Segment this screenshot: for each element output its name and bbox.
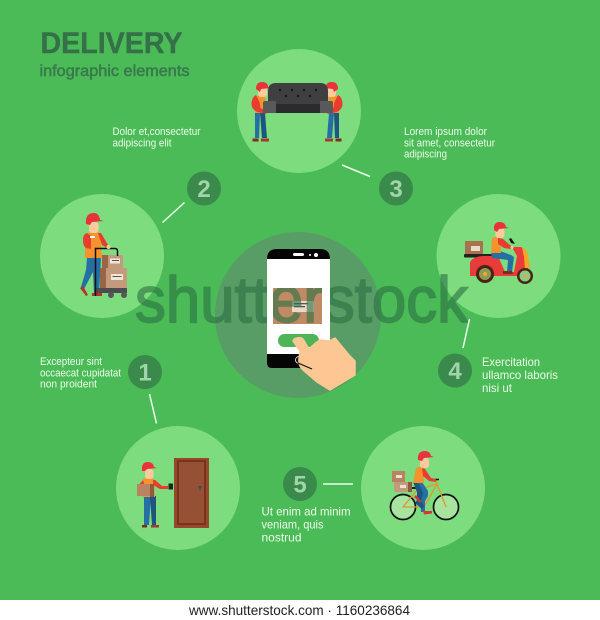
callout: step 5 text	[262, 504, 351, 544]
number badge 3	[379, 172, 413, 206]
subtitle: infographic elements	[40, 63, 190, 80]
number badge 4: 4	[448, 358, 462, 385]
icon: phone speaker and camera	[293, 253, 318, 257]
icon: hand truck with boxes	[95, 248, 127, 298]
callout: step 3 text	[404, 126, 495, 160]
panel: step 2 trolley courier	[40, 194, 164, 318]
panel: step 1 door delivery	[116, 426, 240, 550]
callout: step 4 text: Exercitation	[482, 355, 540, 369]
icon: door	[174, 458, 209, 528]
number badge 5	[283, 467, 317, 501]
icon: phone body	[267, 249, 330, 368]
callout: step 1 text	[40, 356, 121, 390]
connector lines	[150, 165, 470, 484]
callout: step 5 text: veniam, quis	[262, 518, 324, 532]
number badge 1: 1	[138, 360, 152, 386]
icon: parcel on screen	[273, 288, 322, 324]
number badge 2	[187, 172, 221, 206]
callout: step 2 text: Dolor et,consectetur	[112, 126, 201, 138]
icon: confirm button	[278, 334, 319, 347]
icon: rider	[491, 222, 514, 274]
icon: right mover	[323, 82, 343, 142]
icon: pointing hand	[293, 338, 355, 390]
icon: courier arm	[98, 233, 110, 249]
callout: step 5 text: Ut enim ad minim	[262, 504, 351, 518]
callout: step 1 text: occaecat cupidatat	[40, 368, 121, 380]
panel: step 3 sofa movers	[237, 49, 361, 173]
icon: courier	[80, 213, 104, 296]
icon: sofa	[263, 83, 333, 113]
icon: courier at door	[137, 462, 173, 528]
icon: left mover	[251, 82, 271, 142]
icon: home button	[296, 356, 302, 364]
callout: step 2 text: adipiscing elit	[112, 138, 172, 150]
callout: step 2 text	[112, 126, 201, 150]
panel: centre phone	[135, 232, 468, 398]
callout: step 4 text: ullamco laboris	[482, 368, 558, 382]
callout: step 1 text: non proident	[40, 378, 97, 390]
title: DELIVERY	[40, 27, 182, 60]
number badge 4	[438, 354, 472, 388]
number badge 5: 5	[293, 472, 307, 498]
icon: phone screen	[267, 259, 330, 354]
callout: step 3 text: Lorem ipsum dolor	[404, 126, 487, 138]
icon: scooter	[464, 238, 533, 284]
callout: step 5 text: nostrud	[262, 530, 302, 544]
icon: cyclist	[413, 451, 436, 514]
number badge 1	[128, 355, 162, 389]
panel: step 4 scooter courier	[436, 194, 560, 318]
callout: step 4 text: nisi ut	[482, 381, 513, 395]
panel: step 5 bicycle courier	[361, 426, 485, 550]
number badge 2: 2	[197, 176, 211, 203]
callout: step 3 text: sit amet, consectetur	[404, 138, 495, 150]
callout: step 4 text	[482, 355, 558, 395]
number badge 3: 3	[389, 176, 403, 203]
footer credit: www.shutterstock.com · 1160236864	[188, 602, 410, 618]
icon: cargo boxes	[392, 471, 412, 492]
icon: bicycle	[390, 480, 458, 520]
callout: step 3 text: adipiscing	[404, 148, 447, 160]
callout: step 1 text: Excepteur sint	[40, 356, 102, 368]
watermark: shutterstock	[135, 263, 468, 336]
